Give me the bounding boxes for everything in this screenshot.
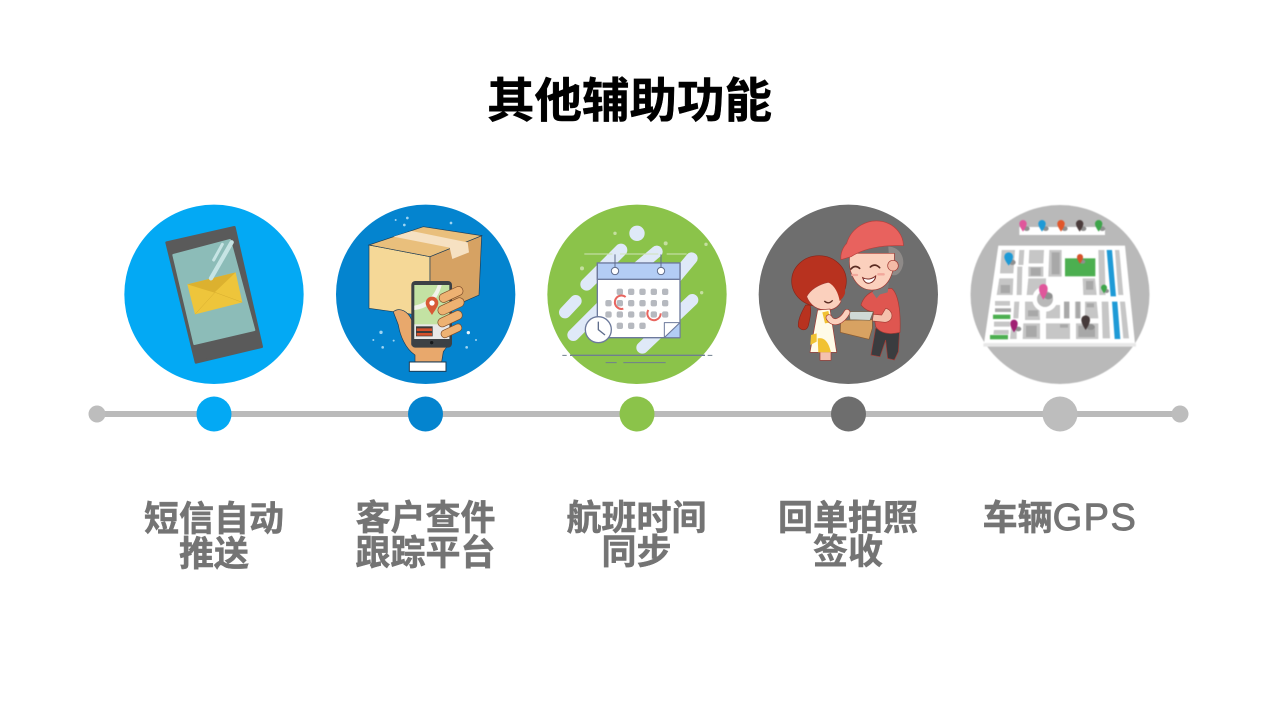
courier xyxy=(841,221,903,360)
label: flight time sync: 同步 xyxy=(601,533,672,572)
timeline xyxy=(88,396,1188,432)
label: photo receipt sign-off: 签收 xyxy=(813,533,883,572)
timeline node 4 xyxy=(831,396,866,432)
timeline node 5 xyxy=(1042,396,1078,432)
label: SMS push: 短信自动 xyxy=(144,500,284,539)
label: customer tracking platform: 客户查件 xyxy=(355,499,496,538)
label: photo receipt sign-off: 回单拍照 xyxy=(778,499,918,538)
label: flight time sync xyxy=(566,499,707,572)
label: customer tracking platform: 跟踪平台 xyxy=(355,534,496,573)
label: vehicle GPS: 车辆GPS xyxy=(983,497,1137,539)
icon: city map with pins xyxy=(970,205,1150,384)
icon: courier and girl signing xyxy=(759,205,938,384)
label: customer tracking platform xyxy=(355,499,496,573)
timeline node 2 xyxy=(408,396,443,432)
pin shadows xyxy=(1009,226,1109,331)
icon: calendar and clock xyxy=(547,205,727,384)
title: 其他辅助功能 xyxy=(487,76,772,128)
icon: phone with envelope xyxy=(124,205,304,384)
parcel xyxy=(840,312,873,339)
label: flight time sync: 航班时间 xyxy=(566,499,707,538)
label: SMS push: 推送 xyxy=(179,535,249,574)
timeline node 1 xyxy=(196,396,232,432)
icon: parcel and phone in hand xyxy=(336,205,515,384)
label: photo receipt sign-off xyxy=(778,499,918,572)
timeline node 3 xyxy=(620,396,654,432)
girl xyxy=(792,256,847,360)
label: SMS push xyxy=(144,500,284,574)
